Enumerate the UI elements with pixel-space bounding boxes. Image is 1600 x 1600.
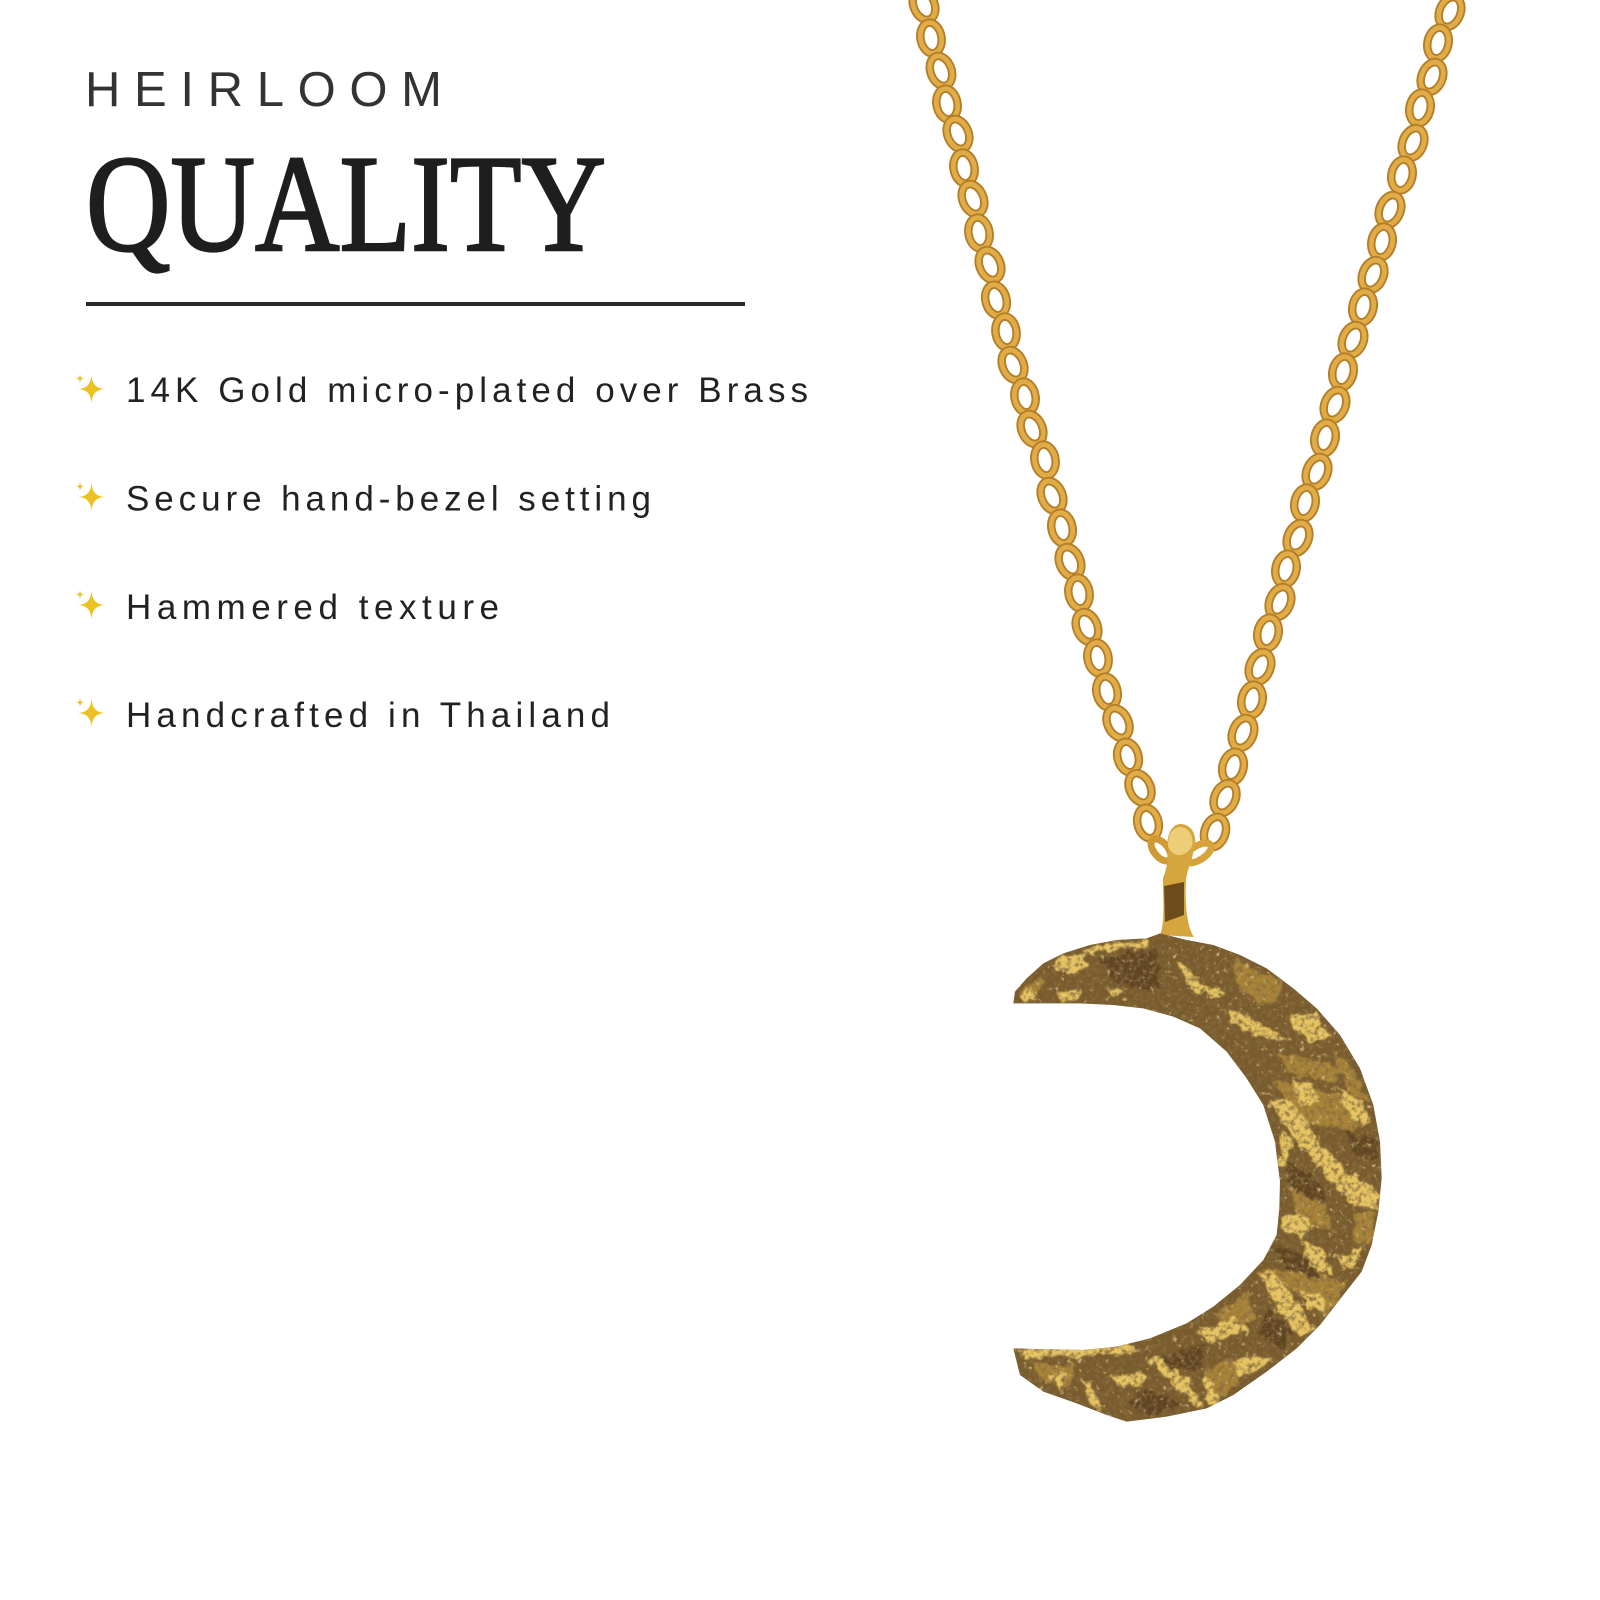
right chain xyxy=(1200,0,1466,850)
mid-tone patches xyxy=(1020,958,1377,1402)
bright highlights xyxy=(1017,939,1377,1412)
feature list xyxy=(76,371,808,735)
left chain xyxy=(908,0,1162,841)
infographic canvas xyxy=(76,0,1466,1422)
feature: gold plating: 14K Gold micro-plated over Brass xyxy=(126,371,808,410)
moon base xyxy=(1013,933,1382,1422)
heading: QUALITY: QUALITY xyxy=(86,127,606,280)
feature: hammered texture: Hammered texture xyxy=(126,588,499,627)
metal sparkle xyxy=(1010,932,1387,1425)
pendant bail xyxy=(1147,824,1214,937)
deep shadows xyxy=(1100,948,1377,1415)
crescent moon pendant xyxy=(1010,932,1387,1425)
necklace xyxy=(908,0,1466,1425)
heading: HEIRLOOM: HEIRLOOM xyxy=(85,63,442,117)
moon hammered texture xyxy=(1010,932,1387,1425)
metal grain xyxy=(1010,932,1387,1425)
heading rule xyxy=(86,302,745,306)
feature: bezel setting: Secure hand-bezel setting xyxy=(126,480,651,518)
feature: handcrafted: Handcrafted in Thailand xyxy=(126,696,610,735)
